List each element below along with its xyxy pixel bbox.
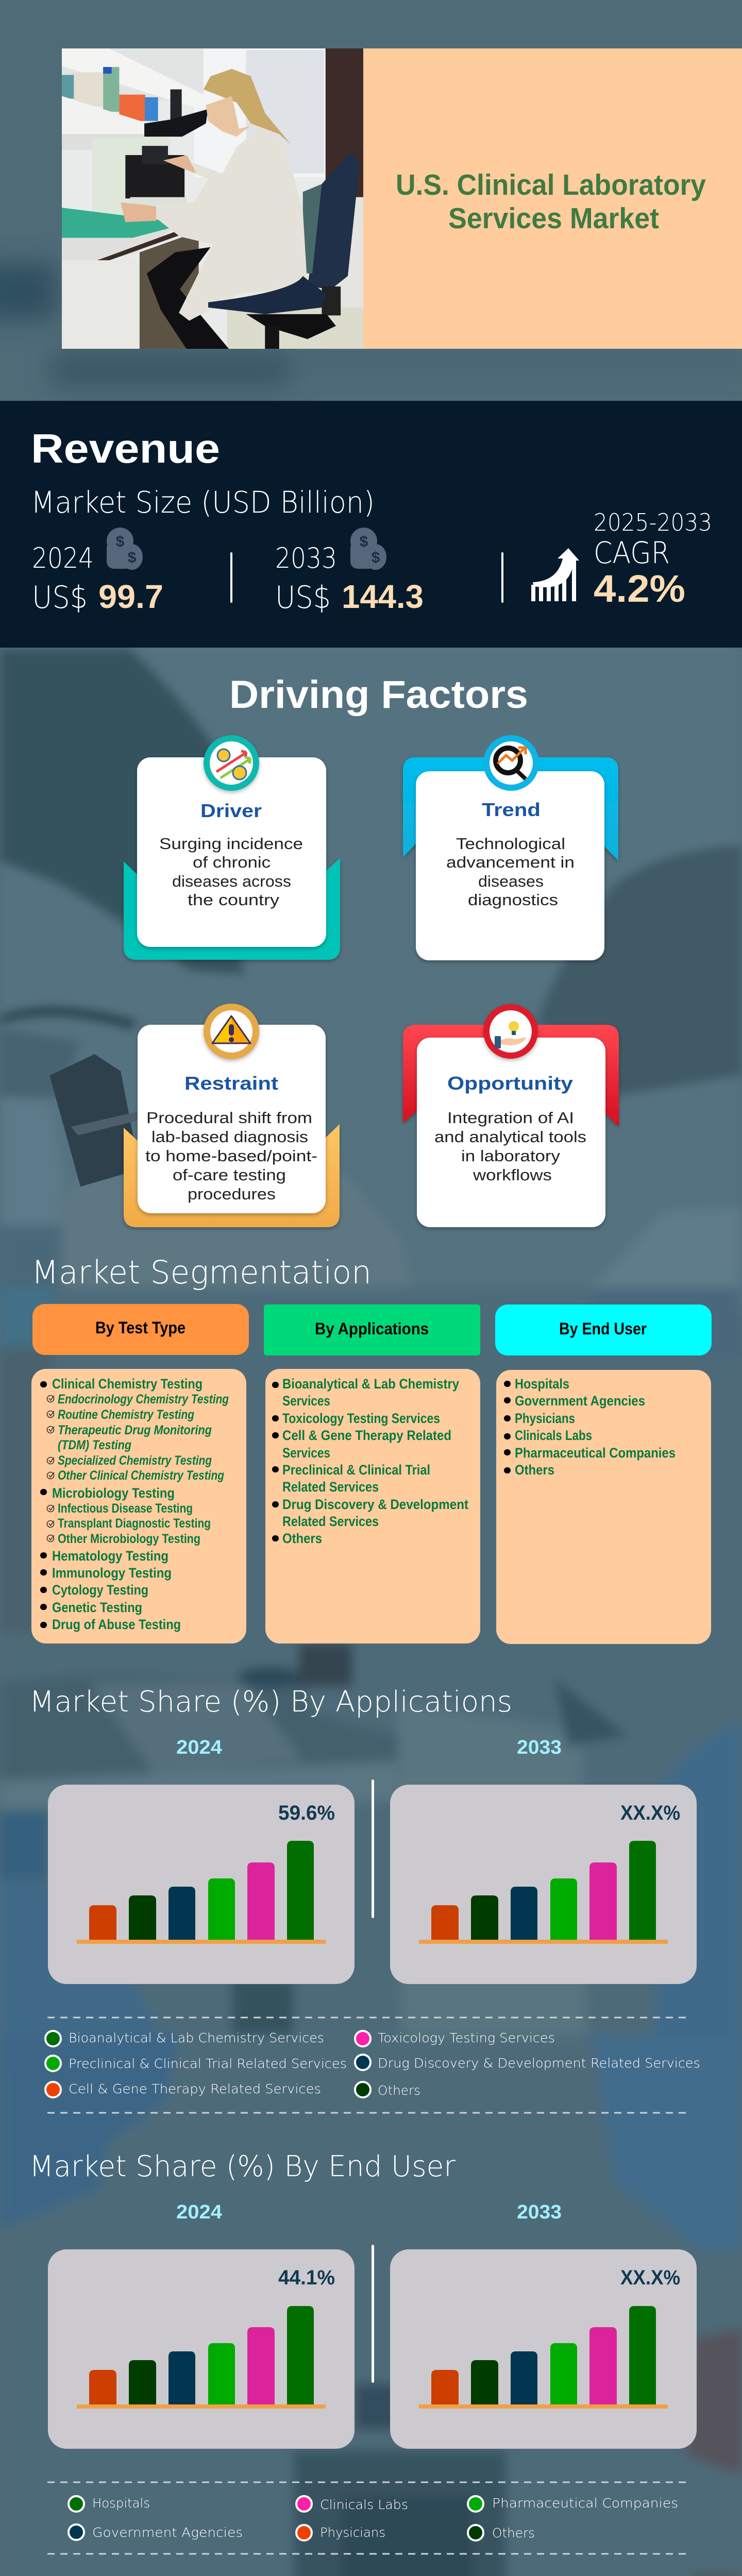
2033 value: 2033 xyxy=(275,542,337,574)
bar chart: end user 2033 xyxy=(390,2249,697,2449)
restraint text: lab-based diagnosis xyxy=(151,1128,308,1146)
heading: market share by end user: Market Share (%) By End User xyxy=(29,2150,456,2183)
trend label: Trend xyxy=(482,799,541,820)
legend: applications: Preclinical & Clinical Trial Related Services xyxy=(69,2056,347,2071)
legend: applications: Bioanalytical & Lab Chemistry Services xyxy=(69,2030,324,2045)
list text: Others xyxy=(282,1531,322,1546)
legend: applications xyxy=(45,2030,700,2098)
heading: revenue: Revenue xyxy=(31,426,220,471)
2024 value xyxy=(32,542,163,616)
legend: applications: Toxicology Testing Services xyxy=(378,2030,555,2045)
list text: Toxicology Testing Services xyxy=(282,1411,440,1426)
header: by end user: By End User xyxy=(559,1319,647,1338)
list text: Services xyxy=(282,1445,330,1461)
legend: applications: Cell & Gene Therapy Related Services xyxy=(69,2081,321,2096)
list text: Related Services xyxy=(282,1514,379,1529)
bar chart: end user 2024 xyxy=(48,2249,355,2449)
check marks xyxy=(47,1395,54,1541)
panel: trend xyxy=(403,735,618,960)
list text: Routine Chemistry Testing xyxy=(58,1408,194,1422)
driver text: diseases across xyxy=(172,872,291,890)
list text: Pharmaceutical Companies xyxy=(515,1445,676,1461)
list text: Preclinical & Clinical Trial xyxy=(282,1462,430,1478)
restraint text: to home-based/point- xyxy=(145,1147,317,1165)
cagr: CAGR xyxy=(594,535,670,570)
list text: Specialized Chemistry Testing xyxy=(58,1453,212,1468)
cagr xyxy=(594,509,712,610)
opportunity text xyxy=(434,1109,586,1184)
list text: Infectious Disease Testing xyxy=(58,1501,193,1516)
bar chart: applications 2024 xyxy=(48,1785,355,1984)
icon: driver xyxy=(204,735,259,791)
list text: Other Microbiology Testing xyxy=(58,1532,200,1546)
trend text: advancement in xyxy=(446,853,575,871)
header: by test type: By Test Type xyxy=(95,1318,185,1337)
panel: opportunity xyxy=(403,1004,619,1227)
bullets xyxy=(504,1381,511,1473)
list text: Other Clinical Chemistry Testing xyxy=(58,1468,224,1483)
trend text: diagnostics xyxy=(468,891,558,909)
list text: Drug of Abuse Testing xyxy=(52,1617,181,1632)
bar chart: end user 2033: XX.X% xyxy=(620,2266,680,2289)
market size label: Market Size (USD Billion) xyxy=(31,485,375,520)
year label 2024: 2024 xyxy=(176,1737,222,1758)
opportunity text: in laboratory xyxy=(461,1147,561,1165)
icon: growth chart xyxy=(531,548,579,601)
year label 2024: 2024 xyxy=(176,2201,222,2223)
bar chart: applications 2033 xyxy=(390,1785,697,1984)
2024 value: US$ xyxy=(32,580,88,616)
2024 value: 99.7 xyxy=(98,578,163,615)
list text: Government Agencies xyxy=(515,1393,645,1409)
driver text: of chronic xyxy=(193,853,271,871)
legend: end user: Pharmaceutical Companies xyxy=(492,2496,678,2511)
title: Services Market xyxy=(448,202,659,235)
opportunity text: and analytical tools xyxy=(434,1128,586,1146)
title xyxy=(396,168,706,235)
cagr: 4.2% xyxy=(594,567,685,610)
header: by end user xyxy=(495,1304,712,1355)
hero: title panel xyxy=(363,48,742,349)
legend: end user: Government Agencies xyxy=(92,2525,243,2540)
opportunity label: Opportunity xyxy=(447,1073,573,1094)
trend text: diseases xyxy=(478,872,544,890)
list text: Cell & Gene Therapy Related xyxy=(282,1428,451,1443)
2033 value xyxy=(275,542,424,616)
panel: restraint xyxy=(124,1004,340,1227)
list text: Drug Discovery & Development xyxy=(282,1497,468,1512)
year label 2033: 2033 xyxy=(517,2201,562,2223)
cagr: 2025-2033 xyxy=(594,509,712,536)
icon: coins 2033: $ xyxy=(372,549,380,566)
bullets xyxy=(40,1381,47,1628)
heading: market segmentation: Market Segmentation xyxy=(31,1253,372,1291)
driver text xyxy=(159,835,303,909)
legend: end user: Hospitals xyxy=(92,2496,150,2511)
list text xyxy=(515,1376,676,1478)
list text: Therapeutic Drug Monitoring xyxy=(58,1423,212,1437)
icon: coins 2033: $ xyxy=(360,533,368,550)
bar chart: applications 2033: XX.X% xyxy=(620,1802,680,1824)
icon: warning xyxy=(204,1004,259,1059)
legend: applications: Drug Discovery & Development Related Services xyxy=(378,2056,700,2071)
legend: end user: Clinicals Labs xyxy=(320,2497,408,2512)
list text: Others xyxy=(515,1462,554,1478)
divider xyxy=(372,2245,374,2383)
header: by applications xyxy=(264,1304,480,1355)
heading: driving factors: Driving Factors xyxy=(229,673,528,717)
trend text xyxy=(446,835,575,909)
list text: Hospitals xyxy=(515,1376,569,1392)
title: U.S. Clinical Laboratory xyxy=(396,168,706,201)
list text: Genetic Testing xyxy=(52,1600,142,1615)
list text: Cytology Testing xyxy=(52,1582,148,1598)
driver text: the country xyxy=(188,891,280,909)
list text: Microbiology Testing xyxy=(52,1485,175,1501)
divider xyxy=(501,552,503,603)
list text: Hematology Testing xyxy=(52,1548,168,1564)
header: by test type xyxy=(32,1304,249,1355)
icon: coins 2024 xyxy=(107,528,143,570)
restraint text xyxy=(145,1109,317,1203)
divider xyxy=(372,1780,374,1918)
trend text: Technological xyxy=(456,835,565,853)
header: by applications: By Applications xyxy=(315,1319,429,1338)
list text: Transplant Diagnostic Testing xyxy=(58,1516,211,1531)
opportunity text: Integration of AI xyxy=(447,1109,574,1127)
list text: Immunology Testing xyxy=(52,1565,172,1581)
icon: coins 2024: $ xyxy=(128,549,137,566)
year label 2033: 2033 xyxy=(517,1737,562,1758)
2033 value: 144.3 xyxy=(342,578,424,615)
panel: applications list xyxy=(265,1369,480,1643)
bar chart: end user 2024: 44.1% xyxy=(278,2266,335,2289)
restraint text: Procedural shift from xyxy=(146,1109,312,1127)
icon: coins 2033 xyxy=(350,528,386,570)
list text: (TDM) Testing xyxy=(58,1438,131,1452)
restraint text: procedures xyxy=(188,1185,276,1203)
icon: trend xyxy=(483,735,539,791)
panel: revenue xyxy=(0,401,742,648)
driver label: Driver xyxy=(200,800,262,821)
legend: end user xyxy=(69,2496,678,2540)
list text xyxy=(282,1376,468,1546)
list text: Bioanalytical & Lab Chemistry xyxy=(282,1376,459,1392)
list text xyxy=(52,1376,229,1632)
driver text: Surging incidence xyxy=(159,835,303,853)
icon: coins 2024: $ xyxy=(116,533,125,550)
bar chart: applications 2024: 59.6% xyxy=(278,1802,335,1824)
icon: opportunity xyxy=(483,1004,538,1059)
list text: Services xyxy=(282,1393,330,1409)
legend: applications: Others xyxy=(378,2083,420,2098)
2024 value: 2024 xyxy=(32,542,94,574)
bullets xyxy=(272,1382,279,1541)
legend: end user: Physicians xyxy=(320,2525,385,2540)
list text: Clinical Chemistry Testing xyxy=(52,1376,203,1392)
2033 value: US$ xyxy=(275,580,331,616)
heading: market share by applications: Market Share (%) By Applications xyxy=(29,1685,512,1719)
divider xyxy=(230,552,232,603)
restraint label: Restraint xyxy=(184,1073,278,1094)
list text: Physicians xyxy=(515,1411,575,1426)
legend: end user: Others xyxy=(492,2526,535,2540)
hero: lab photo xyxy=(61,48,364,350)
panel: end user list xyxy=(496,1370,711,1644)
list text: Clinicals Labs xyxy=(515,1428,592,1443)
opportunity text: workflows xyxy=(473,1166,552,1184)
list text: Endocrinology Chemistry Testing xyxy=(58,1392,229,1406)
panel: driver xyxy=(124,735,340,960)
panel: test type list xyxy=(31,1369,246,1643)
restraint text: of-care testing xyxy=(173,1166,286,1184)
list text: Related Services xyxy=(282,1479,379,1495)
